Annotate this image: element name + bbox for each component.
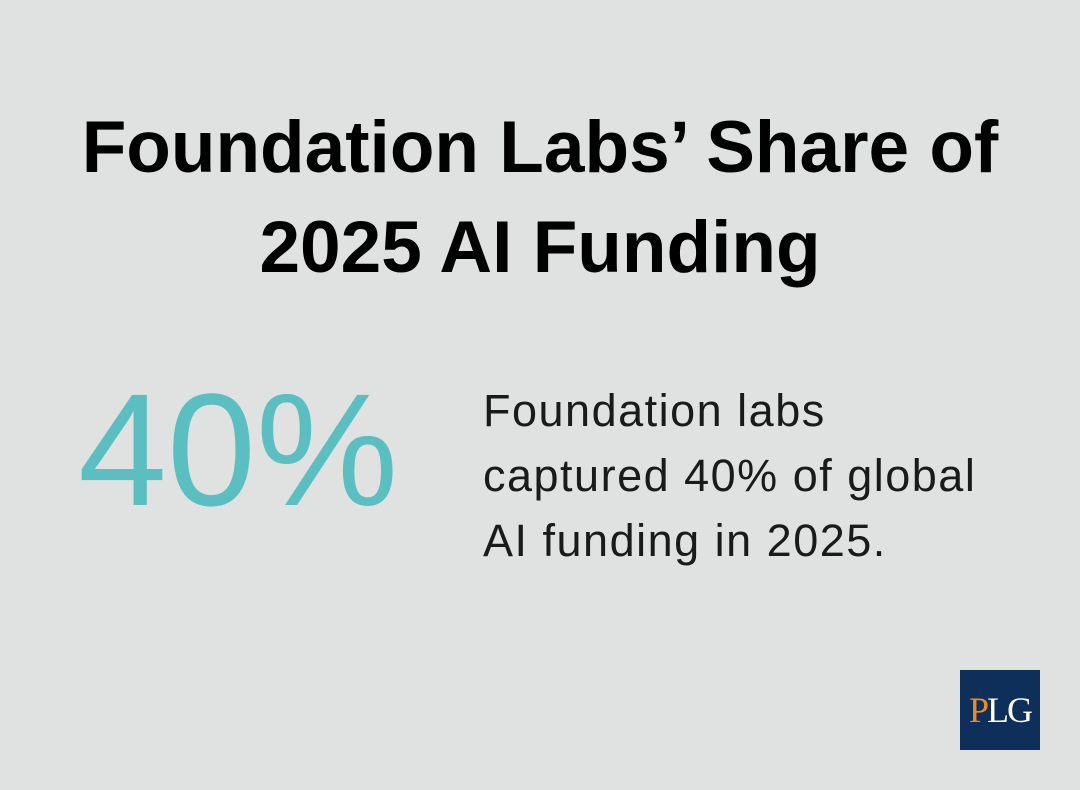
- big stat: 40%: [78, 360, 398, 539]
- description text: captured 40% of global: [483, 450, 976, 501]
- description text: Foundation labs: [483, 385, 826, 436]
- description text: AI funding in 2025.: [483, 515, 887, 566]
- title: 2025 AI Funding: [259, 207, 821, 288]
- logo: PLG: [969, 690, 1031, 730]
- title: Foundation Labs’ Share of: [82, 107, 998, 188]
- logo: [960, 670, 1040, 750]
- title: [82, 107, 998, 288]
- description text: [483, 385, 976, 566]
